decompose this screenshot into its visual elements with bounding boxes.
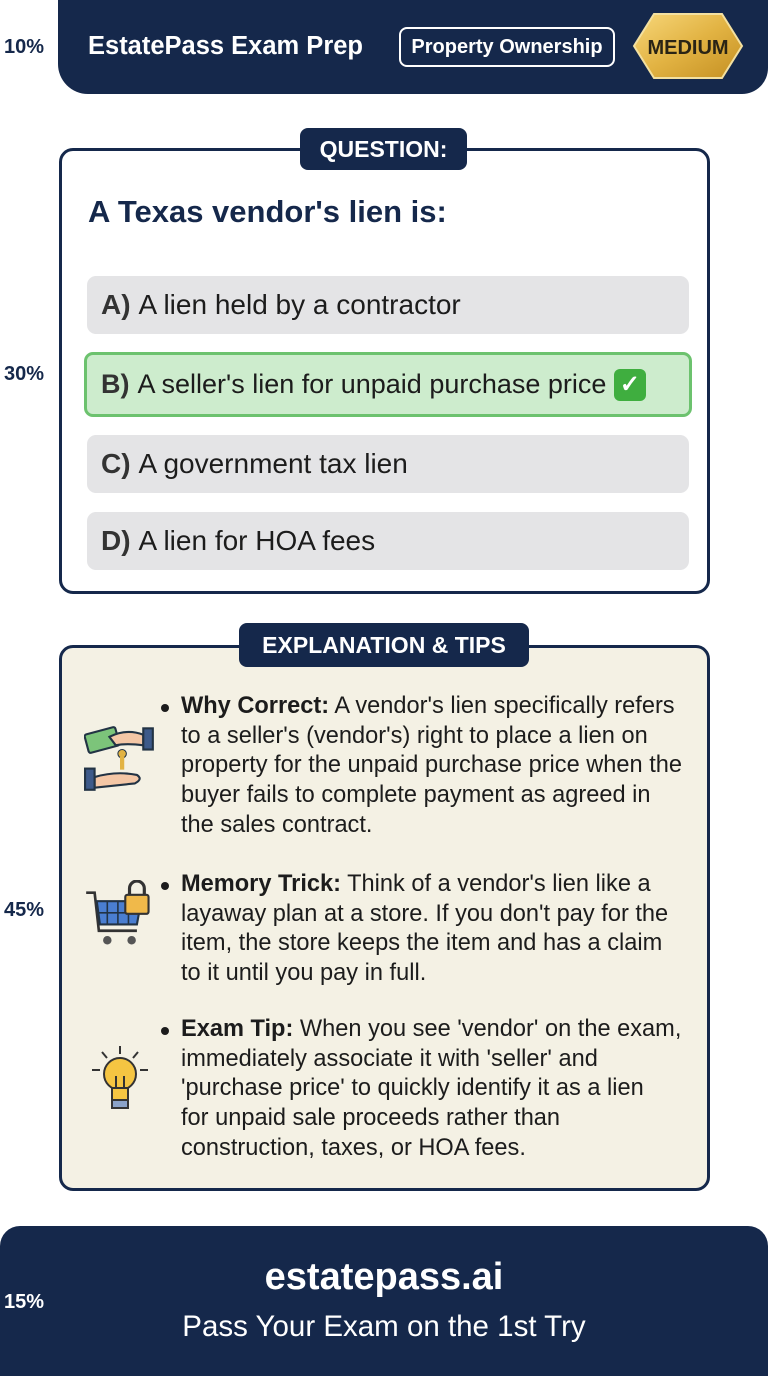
bullet: why correct: buyer fails to complete payment as agreed in (181, 782, 651, 808)
tab: explanation: EXPLANATION & TIPS (262, 632, 506, 658)
option C: A government tax lien (139, 448, 408, 479)
tab: explanation (239, 623, 529, 667)
badge: medium (632, 13, 744, 79)
bullet: exam tip: 'purchase price' to quickly identify it as a lien (181, 1075, 644, 1101)
bullet: why correct: property for the unpaid purchase price when the (181, 752, 682, 778)
footer (0, 1226, 768, 1376)
bullet: why correct: the sales contract. (181, 812, 372, 838)
bullet: memory trick: to it until you pay in full. (181, 960, 426, 986)
option D: A lien for HOA fees (139, 525, 375, 556)
bullet: memory trick: item, the store keeps the item and has a claim (181, 930, 662, 956)
option B (correct): B) (101, 369, 130, 399)
label: 10%: 10% (4, 36, 44, 58)
footer brand: estatepass.ai (265, 1256, 503, 1298)
bullet: exam tip: immediately associate it with 'seller' and (181, 1046, 598, 1072)
tab: question (300, 128, 467, 170)
option B (correct): A seller's lien for unpaid purchase price (138, 369, 606, 399)
pill: topic: Property Ownership (411, 36, 603, 58)
option B (correct): ✓ (620, 370, 640, 398)
option D: D) (101, 525, 131, 556)
pill: topic (399, 27, 615, 67)
bullet: why correct: to a seller's (vendor's) right to place a lien on (181, 723, 648, 749)
option C: C) (101, 448, 131, 479)
bullet: memory trick (161, 871, 668, 986)
option B (correct) (84, 352, 692, 417)
tab: question: QUESTION: (320, 136, 447, 162)
bullet: exam tip: construction, taxes, or HOA fees. (181, 1135, 526, 1161)
option C (87, 435, 689, 493)
bullet: memory trick: Memory Trick: Think of a vendor's lien like a (181, 871, 651, 897)
bullet: exam tip: Exam Tip: When you see 'vendor' on the exam, (181, 1016, 681, 1042)
panel: explanation (59, 645, 710, 1191)
bullet: why correct (161, 693, 682, 838)
footer tagline: Pass Your Exam on the 1st Try (182, 1310, 586, 1343)
bullet: why correct: Why Correct: A vendor's lien specifically refers (181, 693, 675, 719)
icon: light bulb (92, 1046, 148, 1109)
option A: A lien held by a contractor (139, 289, 461, 320)
panel: question (59, 148, 710, 594)
option D (87, 512, 689, 570)
option A (87, 276, 689, 334)
bullet: exam tip (161, 1016, 681, 1161)
bullet: exam tip: for unpaid sale proceeds rather than (181, 1105, 560, 1131)
badge: medium: MEDIUM (647, 37, 729, 59)
header bar (58, 0, 768, 94)
label: 30%: 30% (4, 363, 44, 385)
option A: A) (101, 289, 131, 320)
title: EstatePass Exam Prep (88, 32, 363, 60)
label: 15%: 15% (4, 1291, 44, 1313)
icon: money hands (84, 726, 154, 791)
question text: A Texas vendor's lien is: (88, 194, 447, 229)
label: 45%: 45% (4, 899, 44, 921)
icon: cart with lock (86, 880, 150, 944)
bullet: memory trick: layaway plan at a store. If you don't pay for the (181, 901, 668, 927)
